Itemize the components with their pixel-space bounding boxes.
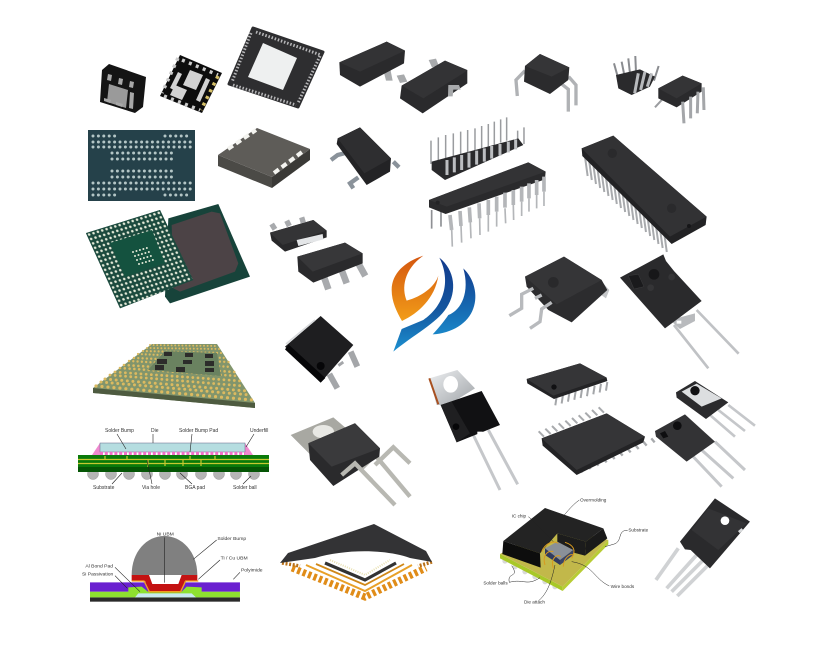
- icon: long DIP package: [582, 136, 707, 252]
- icon: TO-247 right: [620, 254, 739, 368]
- BGA: IC chip and wire bonds: [542, 542, 574, 568]
- icon: QFP cutaway: [280, 524, 432, 597]
- diagram: BGA cutaway: [483, 497, 649, 604]
- icon: DFN small package: [100, 64, 146, 113]
- icon: BGA ball grid: [86, 210, 193, 308]
- flip chip: solder balls: [88, 468, 260, 480]
- bump: UBM layers: [132, 575, 198, 592]
- icon: DFN package 3D: [218, 128, 310, 188]
- bump: labels: Al Bond Pad: [85, 563, 113, 569]
- logo: [392, 256, 475, 352]
- icon: D2PAK left: [285, 316, 357, 388]
- icon: SOT leaded: [331, 127, 399, 188]
- diagram: solder bump cross-section: [82, 531, 263, 602]
- flip chip: labels: Solder Bump: [105, 428, 134, 434]
- BGA: substrate: [500, 525, 608, 591]
- flip chip: labels: Via hole: [142, 485, 160, 491]
- BGA: labels: Die attach: [524, 599, 545, 604]
- logo: right blue swoosh: [433, 268, 475, 334]
- BGA: labels: [483, 497, 649, 604]
- bump: labels: [82, 531, 263, 578]
- flip chip: labels: Substrate: [93, 485, 115, 491]
- bump: labels: Polyimide: [241, 568, 263, 574]
- icon: TO-220 lower left: [291, 417, 410, 505]
- BGA: overmolding: [502, 508, 607, 568]
- icon: SOT-223 pair: [270, 217, 365, 289]
- icon: TO-247 pair: [655, 381, 755, 487]
- bump: labels: Solder Bump: [217, 536, 246, 542]
- BGA: labels: Wire bonds: [611, 584, 635, 589]
- icon: DIP-8 package pair: [614, 56, 704, 123]
- icon: D2PAK right: [509, 257, 609, 328]
- icon: DIP lower: [429, 162, 546, 247]
- flip chip: labels: Solder Bump Pad: [179, 428, 218, 434]
- flip chip: substrate: [78, 455, 269, 472]
- icon: SOIC pair: [527, 363, 655, 475]
- flip chip: labels: Underfill: [250, 428, 268, 434]
- bump: solder dome: [132, 536, 197, 575]
- flip chip: underfill: [92, 443, 253, 455]
- flip chip: bump row: [100, 452, 245, 455]
- bump: base layers: [90, 582, 240, 602]
- icon: BGA pair: [86, 204, 250, 308]
- icon: BGA bottom view: [88, 130, 195, 201]
- diagram: flip chip cross-section: [78, 428, 269, 491]
- icon: TO-220 center: [429, 370, 518, 490]
- BGA: labels: Substrate: [628, 528, 649, 533]
- BGA: labels: Overmolding: [580, 497, 607, 502]
- bump: labels: Ni UBM: [157, 531, 174, 537]
- logo: orange crescent: [392, 256, 438, 321]
- flip chip: labels: BGA pad: [185, 485, 205, 491]
- BGA: solder balls: [502, 558, 558, 589]
- bump: labels: Ti / Cu UBM: [221, 555, 248, 561]
- bump: labels: Si Passivation: [82, 572, 114, 578]
- flip chip: labels: [93, 428, 268, 491]
- icon: TO-220F right: [656, 498, 750, 596]
- icon: DIP upper: [431, 117, 524, 180]
- icon: DIP-4 package: [516, 54, 576, 112]
- logo: main blue swoosh: [393, 258, 453, 352]
- icon: SOT packages pair: [339, 42, 467, 113]
- icon: CPU PGA package: [93, 344, 255, 408]
- flip chip: labels: Die: [151, 428, 159, 434]
- icon: QFN bottom view: [160, 55, 222, 113]
- BGA: labels: Solder balls: [483, 580, 508, 585]
- flip chip: labels: Solder ball: [233, 485, 257, 491]
- icon: QFP exposed pad: [229, 28, 323, 107]
- flip chip: die: [100, 443, 245, 452]
- BGA: labels: IC chip: [512, 513, 527, 518]
